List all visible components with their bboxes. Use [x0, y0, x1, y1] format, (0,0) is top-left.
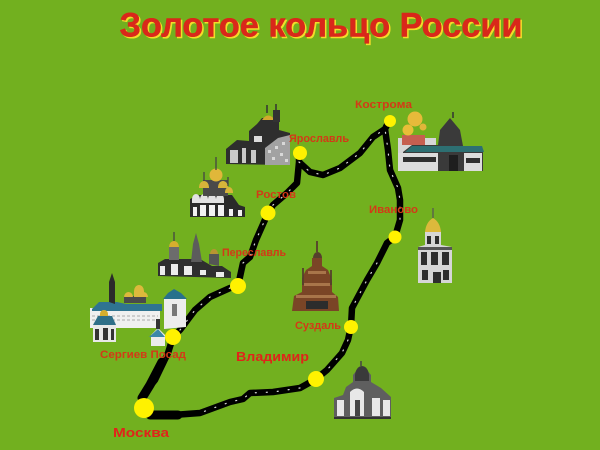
- icon: Rostov cathedral: [190, 157, 245, 217]
- icon: Suzdal wooden church: [292, 241, 339, 311]
- icon: Ivanovo church: [418, 208, 452, 283]
- city labels: Ростов: [256, 189, 296, 201]
- title: Золотое кольцо России: [121, 8, 524, 46]
- city labels: Сергиев Посад: [100, 349, 186, 361]
- route: ring road: [142, 121, 400, 415]
- city labels: Москва: [113, 425, 170, 440]
- city labels: Ярославль: [289, 133, 349, 145]
- icon: Pereslavl churches: [158, 232, 231, 278]
- city labels: Кострома: [355, 99, 413, 111]
- city labels: Суздаль: [295, 320, 341, 332]
- city labels: Переславль: [222, 247, 286, 259]
- title: Золотое кольцо России: [120, 6, 522, 44]
- stops: yellow city markers: [134, 115, 402, 418]
- city labels: [100, 99, 418, 440]
- icon: Yaroslavl church: [226, 104, 290, 165]
- city labels: Иваново: [369, 204, 418, 216]
- icon: Kostroma cathedral: [398, 112, 484, 171]
- icon: Sergiev Posad monastery: [90, 273, 187, 346]
- icon: Vladimir cathedral: [334, 361, 391, 419]
- city labels: Владимир: [236, 349, 309, 364]
